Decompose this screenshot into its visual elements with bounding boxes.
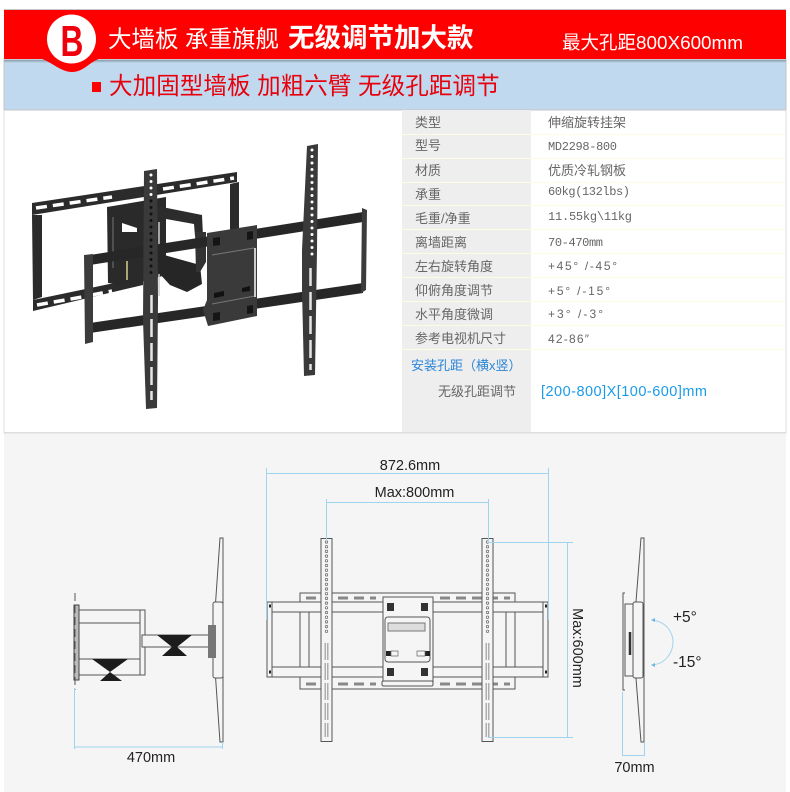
spec values: 42-86″ — [548, 332, 590, 346]
wall plate and TV bars — [267, 593, 548, 689]
spec values: 70-470mm — [548, 236, 603, 250]
spec values: 优质冷轧钢板 — [548, 163, 626, 178]
TV bars — [84, 208, 367, 344]
spec values: +3° /-3° — [548, 307, 603, 321]
spec labels: 无级孔距调节 — [438, 384, 516, 399]
spec values: +45° /-45° — [548, 259, 617, 273]
swivel arms — [107, 197, 206, 296]
spec labels: 参考电视机尺寸 — [415, 331, 506, 346]
diagram: tilt view with 70mm — [614, 538, 702, 776]
spec labels: 毛重/净重 — [415, 211, 471, 226]
icon: B badge — [38, 14, 103, 72]
subheading: feature line: 大加固型墙板 加粗六臂 无级孔距调节 — [109, 73, 500, 100]
spec labels: 离墙距离 — [415, 235, 467, 250]
spec values: 伸缩旋转挂架 — [548, 115, 626, 130]
panel: spec table — [402, 110, 786, 432]
spec labels: 仰俯角度调节 — [415, 283, 493, 298]
diagram: front view with dimensions: 872.6mm — [380, 458, 440, 474]
left rail — [143, 169, 158, 409]
spec values — [548, 115, 632, 346]
spec labels — [411, 115, 522, 399]
panel: header banner — [4, 9, 786, 110]
icon: B badge: B — [60, 17, 83, 66]
diagram: front view with dimensions: Max:600mm — [569, 608, 585, 688]
center plate — [203, 225, 257, 326]
heading: product title: 无级调节加大款 — [288, 23, 474, 53]
image: product wall mount — [32, 144, 367, 409]
spec labels: 型号 — [415, 138, 441, 153]
spec value: hole range: [200-800]X[100-600]mm — [541, 384, 707, 400]
spec values: 11.55kg\11kg — [548, 210, 632, 224]
diagram: tilt view with 70mm: 70mm — [614, 760, 655, 776]
spec values: +5° /-15° — [548, 284, 610, 298]
text: maximum hole distance: 最大孔距 — [562, 32, 636, 53]
spec labels: 材质 — [415, 163, 441, 178]
spec labels: 承重 — [415, 187, 441, 202]
diagram: tilt view with 70mm: +5° — [673, 609, 697, 626]
spec labels: 水平角度微调 — [415, 307, 493, 322]
diagram: front view with dimensions — [266, 458, 585, 742]
spec labels: 安装孔距（横x竖） — [411, 358, 522, 373]
diagram: side view with 470mm — [74, 538, 223, 766]
spec labels: 左右旋转角度 — [415, 259, 493, 274]
text: maximum hole distance — [562, 32, 743, 53]
wall plate — [32, 172, 239, 311]
vertical rails — [321, 538, 493, 742]
text: maximum hole distance: 800X600mm — [636, 33, 743, 53]
heading: product title: 大墙板 承重旗舰 — [108, 26, 279, 52]
spec values: MD2298-800 — [548, 140, 617, 154]
spec values: 60kg(132lbs) — [548, 185, 630, 199]
right rail — [302, 144, 318, 376]
center plate — [382, 597, 433, 686]
spec labels: 类型 — [415, 115, 441, 130]
diagram: front view with dimensions: Max:800mm — [375, 485, 454, 501]
diagram: side view with 470mm: 470mm — [127, 750, 175, 766]
diagram: tilt view with 70mm: -15° — [673, 654, 702, 671]
arrow: tilt arc — [651, 618, 673, 667]
